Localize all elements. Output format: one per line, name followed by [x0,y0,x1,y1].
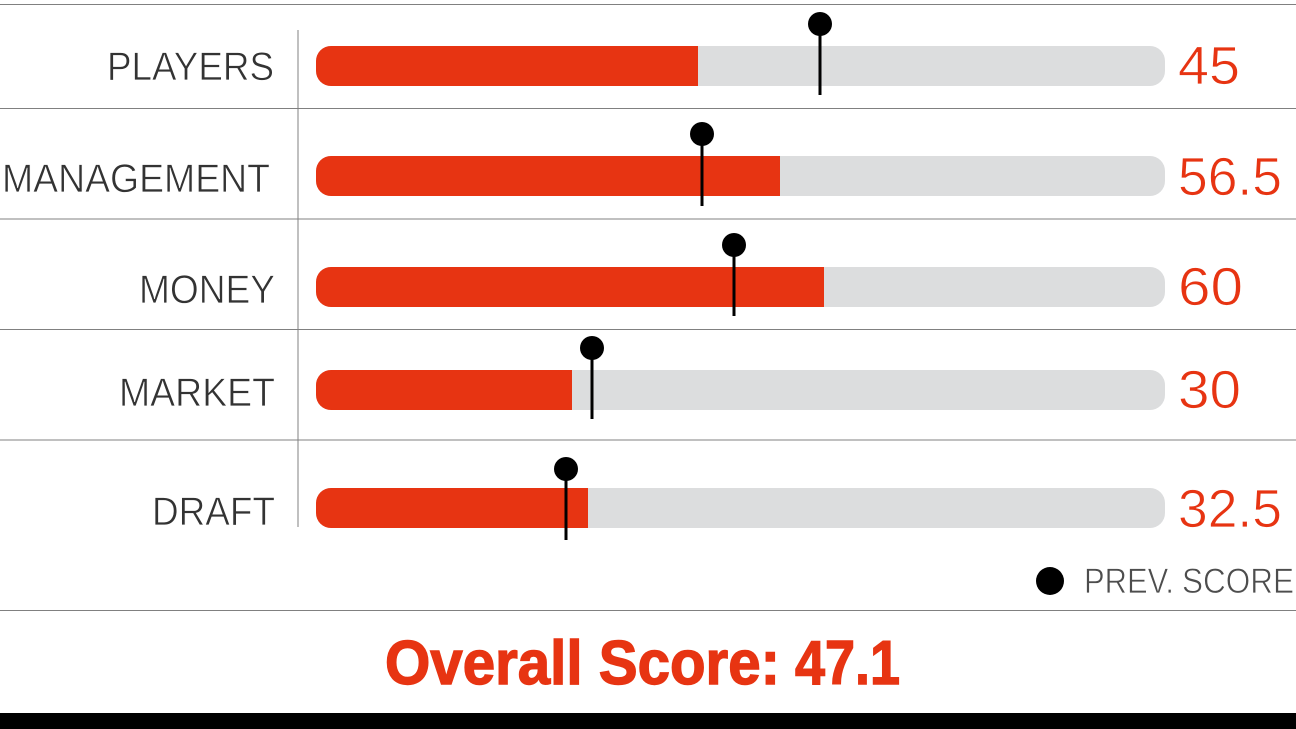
previous score marker: market [580,336,604,419]
score: money: 60 [1178,257,1243,317]
bar track: money [316,267,1165,307]
label: management: MANAGEMENT [2,157,270,201]
bar track: draft [316,488,1165,528]
legend dot [1036,567,1064,595]
legend label: PREV. [1084,562,1174,601]
label: money: MONEY [139,268,275,312]
label: market: MARKET [119,371,275,415]
previous score marker: players [808,12,832,95]
score: draft: 32.5 [1178,479,1282,539]
score: market: 30 [1178,360,1241,420]
label: players: PLAYERS [107,45,274,89]
score: players: 45 [1178,36,1240,96]
bar value: draft [316,488,588,528]
label: draft: DRAFT [152,490,275,534]
score: management: 56.5 [1178,147,1282,207]
overall score: Overall Score: [385,629,780,698]
bar value: players [316,46,698,86]
row: draft [152,457,1282,540]
bar value: money [316,267,824,307]
previous score marker: draft [554,457,578,540]
previous score marker: money [722,233,746,316]
bar track: market [316,370,1165,410]
bar track: players [316,46,1165,86]
previous score marker: management [690,122,714,206]
overall score: 47.1 [795,629,900,698]
bar value: management [316,156,780,196]
row: market [119,336,1241,420]
row: money [139,233,1243,317]
bar value: market [316,370,572,410]
row: players [107,12,1240,96]
row: management [2,122,1282,207]
bar track: management [316,156,1165,196]
legend: previous score [1036,562,1294,601]
bottom black band [0,713,1296,729]
